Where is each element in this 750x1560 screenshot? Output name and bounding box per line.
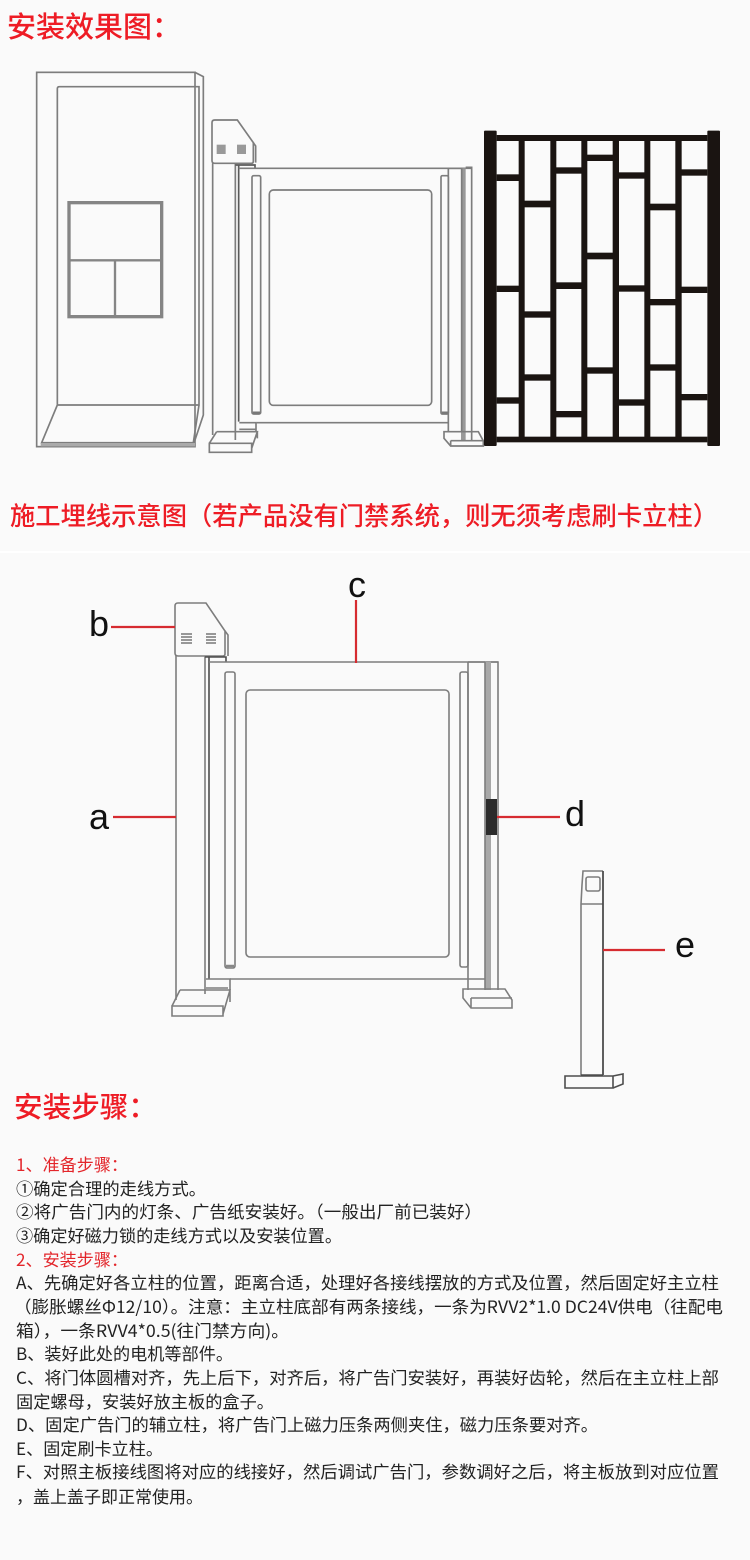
installation steps: B、装好此处的电机等部件。: [16, 1340, 233, 1365]
heading: installation steps: 安装步骤：: [14, 1085, 157, 1126]
label d: d: [565, 793, 585, 834]
title: installation effect: 安装效果图：: [7, 4, 181, 46]
sub-heading: installation: 2、安装步骤：: [16, 1246, 128, 1271]
installation steps: D、固定广告门的辅立柱，将广告门上磁力压条两侧夹住，磁力压条要对齐。: [16, 1411, 598, 1436]
illustration: black lattice fence: [484, 131, 720, 446]
installation steps: F、对照主板接线图将对应的线接好，然后调试广告门，参数调好之后，将主板放到对应位置: [16, 1458, 719, 1483]
label c: c: [348, 564, 366, 605]
illustration: advertising gate: [209, 120, 483, 452]
kiosk window grid: [69, 203, 162, 317]
control box on main post: [212, 120, 256, 163]
heading: wiring diagram: 施工埋线示意图（若产品没有门禁系统，则无须考虑刷卡立柱）: [10, 497, 718, 533]
preparation steps: ②将广告门内的灯条、广告纸安装好。（一般出厂前已装好）: [16, 1198, 482, 1223]
post bases: [209, 423, 483, 452]
text block: instructions: [14, 1151, 723, 1508]
preparation steps: ①确定合理的走线方式。: [16, 1175, 206, 1200]
illustration: advertising kiosk: [37, 72, 203, 447]
installation steps: C、将门体圆槽对齐，先上后下，对齐后，将广告门安装好，再装好齿轮，然后在主立柱上部: [16, 1364, 719, 1389]
installation steps: A、先确定好各立柱的位置，距离合适，处理好各接线摆放的方式及位置，然后固定好主立柱: [16, 1269, 719, 1294]
diagram: gate with labelled parts: [89, 564, 695, 1088]
installation steps: 箱），一条RVV4*0.5(往门禁方向)。: [16, 1317, 289, 1342]
part b: control box: [175, 603, 228, 656]
installation steps: 固定螺母，安装好放主板的盒子。: [16, 1388, 274, 1413]
post bases: [172, 979, 512, 1016]
door panel: [239, 168, 472, 423]
part d: auxiliary post with magnetic lock: [468, 662, 498, 990]
part a: main post: [176, 656, 205, 1000]
part c: door panel: [209, 662, 498, 979]
installation steps: E、固定刷卡立柱。: [16, 1435, 163, 1460]
preparation steps: ③确定好磁力锁的走线方式以及安装位置。: [16, 1222, 342, 1247]
installation steps: [14, 1269, 723, 1508]
installation steps: （膨胀螺丝Φ12/10）。注意：主立柱底部有两条接线，一条为RVV2*1.0 DC24V供电（往配电: [14, 1293, 723, 1318]
label e: e: [675, 924, 695, 965]
label b: b: [89, 603, 109, 644]
label a: a: [89, 796, 110, 837]
part e: card reader post: [565, 871, 623, 1088]
installation steps: ，盖上盖子即正常使用。: [16, 1483, 203, 1508]
preparation steps: [16, 1175, 482, 1247]
sub-heading: preparation: 1、准备步骤：: [16, 1151, 128, 1176]
auxiliary post: [448, 167, 472, 440]
main post: [213, 163, 235, 440]
leader lines: [111, 600, 665, 950]
